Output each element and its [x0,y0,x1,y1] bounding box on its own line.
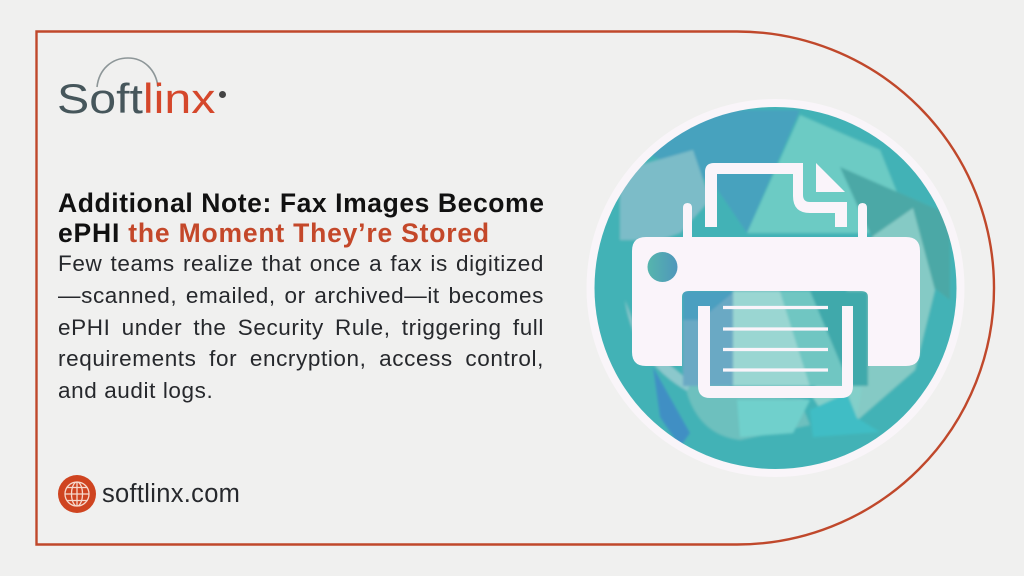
logo: Softlinx [57,57,226,122]
body text: ePHI under the Security Rule, triggering full [58,315,544,340]
logo: Softlinx: Softlinx [57,75,215,122]
printer [632,163,920,398]
circle background [586,99,964,477]
website footer: softlinx.com [102,480,240,508]
indicator light [648,252,678,282]
body text: and audit logs. [58,378,213,403]
heading: Additional Note: Fax Images Become [58,188,545,218]
printer illustration [586,99,964,477]
heading [58,188,545,248]
body text: requirements for encryption, access control, [58,346,544,371]
icon: globe [58,475,96,513]
heading: ePHI the Moment They’re Stored [58,218,490,248]
top paper [683,163,867,240]
body with slot [632,237,920,366]
body text: —scanned, emailed, or archived—it becomes [58,283,544,308]
body text: Few teams realize that once a fax is digitized [58,251,544,276]
website footer [58,475,240,513]
body text [58,251,544,403]
output sheet [698,306,853,398]
